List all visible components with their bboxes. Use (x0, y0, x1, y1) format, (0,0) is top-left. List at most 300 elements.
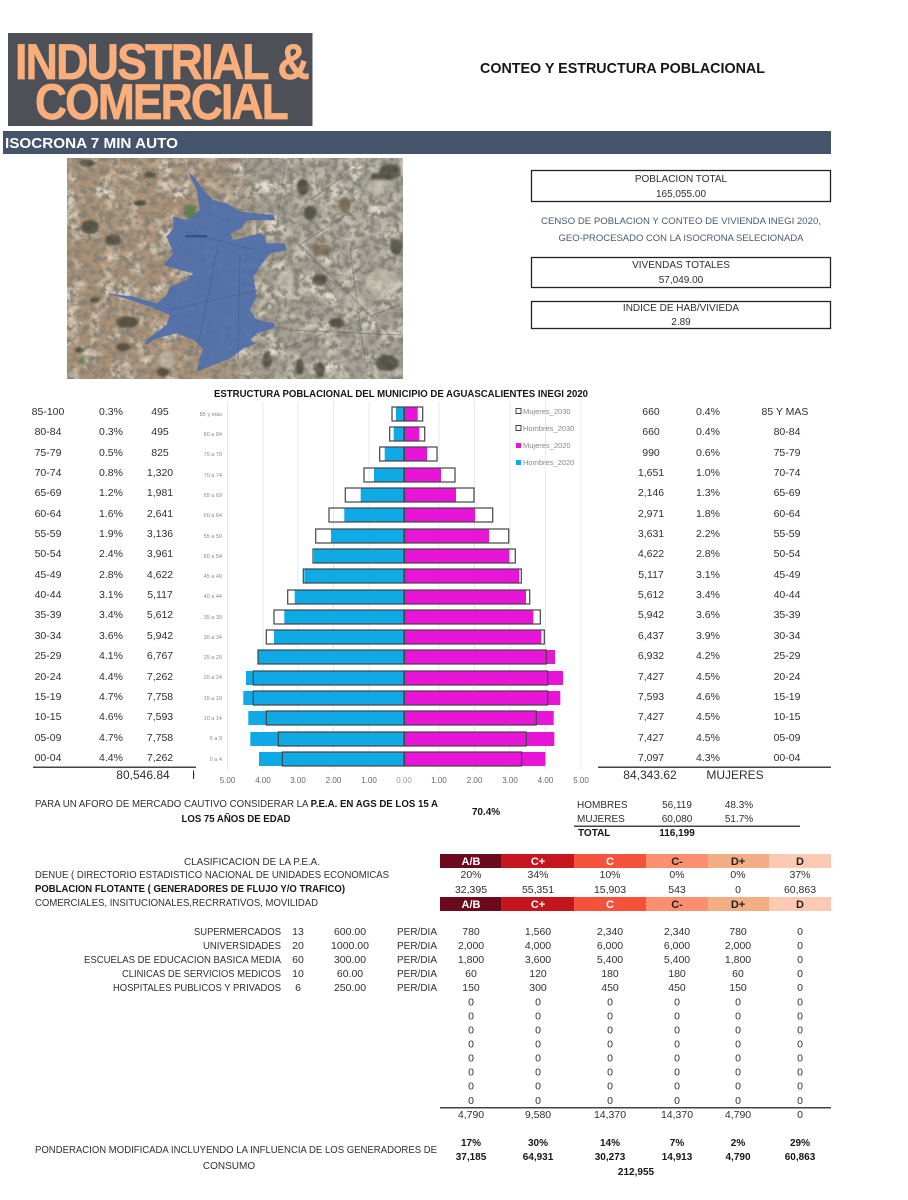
table: traffic generators: 0 (535, 1038, 541, 1050)
table: men by age: 65-69 (35, 487, 62, 499)
table: men by age: 7,758 (147, 732, 173, 744)
table: traffic generators: ESCUELAS DE EDUCACION BASICA MEDIA (84, 955, 281, 966)
bars: 2030 women outline (404, 407, 548, 766)
table: P.E.A. by sex: TOTAL (578, 828, 610, 839)
table: women by age: 7,427 (638, 732, 664, 744)
socioeconomic header: top (440, 854, 831, 868)
table: traffic generators: 0 (535, 1024, 541, 1036)
modified weighting values: 4,790 (725, 1152, 751, 1163)
table: traffic generators: 0 (797, 968, 803, 980)
table: traffic generators: 150 (462, 982, 480, 994)
stat: 70.4 percent: 70.4% (472, 807, 500, 818)
chart x axis (220, 776, 589, 785)
table: women by age: 5,612 (638, 589, 664, 601)
table: women by age: 75-79 (774, 447, 801, 459)
table: women by age: 7,427 (638, 671, 664, 683)
logo: Industrial & Comercial: COMERCIAL (35, 74, 287, 130)
table: women by age: 4.2% (696, 650, 720, 662)
chart age labels: 70 a 74 (204, 473, 222, 479)
modified weighting values: 17% (461, 1138, 481, 1149)
table: traffic generators: 60.00 (337, 968, 363, 980)
table: traffic generators: 0 (535, 1052, 541, 1064)
table: men by age: 0.3% (99, 426, 123, 438)
source note (541, 216, 821, 244)
table: traffic generators: 0 (797, 1080, 803, 1092)
socioeconomic header: bottom: C+ (531, 899, 545, 911)
table: traffic generators: 0 (797, 1010, 803, 1022)
table: women by age: 1,651 (638, 467, 664, 479)
table: women by age: 40-44 (774, 589, 801, 601)
population pyramid chart (200, 402, 589, 785)
table: traffic generators: 9,580 (525, 1109, 551, 1121)
table: women by age: 7,097 (638, 752, 664, 764)
table: women by age: 4.5% (696, 711, 720, 723)
table: men by age: 00-04 (35, 752, 62, 764)
table: men by age: 4.6% (99, 711, 123, 723)
note: captive market: PARA UN AFORO DE MERCADO CAUTIVO CONSIDERAR LA P.E.A. EN AGS DE LOS 15 A (35, 799, 438, 810)
table: men by age: 7,262 (147, 671, 173, 683)
table: women by age: MUJERES (706, 768, 764, 782)
table: traffic generators: 450 (668, 982, 686, 994)
table: traffic generators: 0 (607, 1038, 613, 1050)
chart x axis: 5.00 (220, 776, 236, 785)
table: traffic generators: 250.00 (334, 982, 366, 994)
classification row labels (35, 857, 389, 909)
table: traffic generators: 20 (292, 940, 304, 952)
chart age labels: 20 a 24 (204, 675, 222, 681)
table: traffic generators: 0 (674, 996, 680, 1008)
table: traffic generators: 0 (468, 996, 474, 1008)
table: traffic generators: 780 (462, 926, 480, 938)
table: women by age (598, 406, 831, 782)
table: women by age: 7,593 (638, 691, 664, 703)
table: traffic generators: 0 (797, 982, 803, 994)
table: traffic generators: 5,400 (664, 954, 690, 966)
chart age labels: 60 a 64 (204, 513, 222, 519)
DENUE values: 15,903 (594, 884, 626, 896)
table: traffic generators: CLINICAS DE SERVICIOS MEDICOS (122, 969, 281, 980)
chart age labels: 65 a 69 (204, 493, 222, 499)
table: men by age: 7,262 (147, 752, 173, 764)
stat box: inhabitants per dwelling: 2.89 (671, 317, 691, 328)
table: P.E.A. by sex: 60,080 (662, 814, 693, 825)
table: traffic generators: 0 (735, 1024, 741, 1036)
table: women by age: 0.6% (696, 447, 720, 459)
modified weighting values: 29% (790, 1138, 810, 1149)
modified weighting values: 60,863 (785, 1152, 816, 1163)
DENUE percentages: 0% (730, 869, 746, 881)
table: traffic generators: 13 (292, 926, 304, 938)
chart age labels (200, 412, 222, 763)
table: traffic generators: 0 (735, 996, 741, 1008)
table: traffic generators: 6,000 (664, 940, 690, 952)
table: women by age: 3.9% (696, 630, 720, 642)
modified weighting values (456, 1138, 816, 1178)
table: men by age: 25-29 (35, 650, 62, 662)
table: men by age: 4.7% (99, 691, 123, 703)
chart x axis: 2.00 (326, 776, 342, 785)
modified weighting note: PONDERACION MODIFICADA INCLUYENDO LA INFLUENCIA DE LOS GENERADORES DE (35, 1145, 437, 1156)
table: traffic generators: 0 (797, 996, 803, 1008)
chart x axis: 3.00 (502, 776, 518, 785)
table: men by age (32, 406, 201, 782)
table: traffic generators (84, 926, 831, 1121)
socioeconomic header: bottom: C- (671, 899, 683, 911)
table: traffic generators: 2,000 (458, 940, 484, 952)
chart legend (516, 407, 574, 467)
table: traffic generators: 0 (468, 1052, 474, 1064)
table: women by age: 660 (642, 426, 660, 438)
table: traffic generators: 0 (468, 1024, 474, 1036)
table: traffic generators: 4,790 (725, 1109, 751, 1121)
table: traffic generators: 6 (295, 982, 301, 994)
table: traffic generators: 0 (607, 1024, 613, 1036)
table: women by age: 4,622 (638, 548, 664, 560)
table: men by age: 6,767 (147, 650, 173, 662)
stat box: inhabitants per dwelling: INDICE DE HAB/VIVIEDA (623, 303, 739, 314)
table: women by age: 3.6% (696, 609, 720, 621)
table: traffic generators: 0 (797, 1066, 803, 1078)
section header bar (3, 131, 831, 154)
table: traffic generators: 60 (465, 968, 477, 980)
DENUE percentages (460, 869, 811, 881)
modified weighting note (35, 1145, 437, 1172)
table: men by age: 1.6% (99, 508, 123, 520)
table: traffic generators: 0 (674, 1052, 680, 1064)
table: traffic generators: 0 (735, 1052, 741, 1064)
table: men by age: 495 (151, 406, 169, 418)
title: CONTEO Y ESTRUCTURA POBLACIONAL (480, 60, 765, 77)
table: women by age: 3,631 (638, 528, 664, 540)
stat box: total dwellings (532, 258, 830, 288)
table: traffic generators: 0 (797, 940, 803, 952)
table: traffic generators: 0 (468, 1080, 474, 1092)
table: traffic generators: 0 (735, 1010, 741, 1022)
DENUE values: 32,395 (455, 884, 487, 896)
chart age labels: 0 a 4 (210, 757, 222, 763)
table: traffic generators: 0 (797, 1095, 803, 1107)
table: P.E.A. by sex (574, 800, 800, 839)
chart age labels: 55 a 59 (204, 534, 222, 540)
chart x axis: 1.00 (361, 776, 377, 785)
chart legend: Mujeres_2030 (523, 407, 571, 416)
table: traffic generators: 0 (607, 996, 613, 1008)
table: men by age: 0.5% (99, 447, 123, 459)
table: traffic generators: 5,400 (597, 954, 623, 966)
socioeconomic header: top: C- (671, 856, 683, 868)
modified weighting values: 7% (670, 1138, 684, 1149)
bars: 2020 men (243, 407, 404, 766)
table: traffic generators: 0 (797, 926, 803, 938)
socioeconomic header: top: C (606, 856, 614, 868)
table: traffic generators: 0 (607, 1066, 613, 1078)
table: men by age: 3.1% (99, 589, 123, 601)
DENUE values: 55,351 (522, 884, 554, 896)
table: traffic generators: HOSPITALES PUBLICOS Y PRIVADOS (113, 983, 281, 994)
table: men by age: H (192, 768, 201, 782)
modified weighting note: CONSUMO (203, 1161, 255, 1172)
table: men by age: 4,622 (147, 569, 173, 581)
table: men by age: 2.8% (99, 569, 123, 581)
table: men by age: 85-100 (32, 406, 65, 418)
note: captive market (35, 799, 438, 825)
map: isochrone over satellite image (67, 158, 403, 379)
stat box: inhabitants per dwelling (532, 302, 830, 328)
table: men by age: 0.3% (99, 406, 123, 418)
table: traffic generators: 14,370 (594, 1109, 626, 1121)
stat box: total dwellings: 57,049.00 (659, 275, 704, 286)
bars: 2030 men outline (253, 407, 404, 766)
table: traffic generators: 0 (735, 1066, 741, 1078)
table: traffic generators: 180 (668, 968, 686, 980)
chart age labels: 75 a 79 (204, 452, 222, 458)
table: men by age: 60-64 (35, 508, 62, 520)
DENUE values: 543 (668, 884, 686, 896)
table: women by age: 60-64 (774, 508, 801, 520)
table: women by age: 35-39 (774, 609, 801, 621)
stat box: total population: POBLACION TOTAL (635, 174, 728, 185)
table: traffic generators: 2,000 (725, 940, 751, 952)
table: women by age: 55-59 (774, 528, 801, 540)
table: men by age: 10-15 (35, 711, 62, 723)
table: women by age: 3.1% (696, 569, 720, 581)
DENUE percentages: 37% (789, 869, 811, 881)
table: men by age: 2,641 (147, 508, 173, 520)
section header bar: ISOCRONA 7 MIN AUTO (5, 135, 178, 152)
table: women by age: 45-49 (774, 569, 801, 581)
source note: GEO-PROCESADO CON LA ISOCRONA SELECIONADA (558, 233, 804, 244)
table: women by age: 1.8% (696, 508, 720, 520)
chart x axis: 3.00 (290, 776, 306, 785)
table: traffic generators: 0 (535, 996, 541, 1008)
table: traffic generators: 150 (729, 982, 747, 994)
socioeconomic header: top: D (796, 856, 804, 868)
table: traffic generators: 0 (797, 1024, 803, 1036)
table: women by age: 660 (642, 406, 660, 418)
table: traffic generators: 0 (535, 1010, 541, 1022)
modified weighting values: 64,931 (523, 1152, 554, 1163)
chart x axis: 0.00 (396, 776, 412, 785)
table: men by age: 40-44 (35, 589, 62, 601)
table: women by age: 7,427 (638, 711, 664, 723)
classification row labels: CLASIFICACION DE LA P.E.A. (184, 857, 320, 868)
classification row labels: DENUE ( DIRECTORIO ESTADISTICO NACIONAL DE UNIDADES ECONOMICAS (35, 870, 389, 881)
table: traffic generators: 600.00 (334, 926, 366, 938)
logo: Industrial & Comercial: INDUSTRIAL & (15, 34, 309, 90)
table: traffic generators: PER/DIA (397, 983, 437, 994)
table: traffic generators: 60 (292, 954, 304, 966)
table: women by age: 85 Y MAS (762, 406, 808, 418)
stat box: total dwellings: VIVENDAS TOTALES (632, 260, 730, 271)
table: women by age: 84,343.62 (623, 768, 677, 782)
table: men by age: 30-34 (35, 630, 62, 642)
chart x axis: 1.00 (431, 776, 447, 785)
chart age labels: 50 a 54 (204, 554, 222, 560)
table: traffic generators: 10 (292, 968, 304, 980)
chart x axis: 4.00 (255, 776, 271, 785)
chart age labels: 40 a 44 (204, 594, 222, 600)
table: men by age: 05-09 (35, 732, 62, 744)
table: men by age: 35-39 (35, 609, 62, 621)
table: traffic generators: PER/DIA (397, 941, 437, 952)
DENUE percentages: 34% (527, 869, 549, 881)
table: men by age: 20-24 (35, 671, 62, 683)
table: women by age: 3.4% (696, 589, 720, 601)
chart age labels: 5 a 9 (210, 736, 222, 742)
table: men by age: 825 (151, 447, 169, 459)
table: traffic generators: 0 (468, 1066, 474, 1078)
table: men by age: 5,942 (147, 630, 173, 642)
chart legend: Mujeres_2020 (523, 441, 571, 450)
table: men by age: 4.1% (99, 650, 123, 662)
table: men by age: 70-74 (35, 467, 62, 479)
table: women by age: 4.5% (696, 732, 720, 744)
table: traffic generators: PER/DIA (397, 969, 437, 980)
classification row labels: COMERCIALES, INSITUCIONALES,RECRRATIVOS, MOVILIDAD (35, 898, 318, 909)
table: women by age: 5,942 (638, 609, 664, 621)
table: traffic generators: 1,560 (525, 926, 551, 938)
table: women by age: 25-29 (774, 650, 801, 662)
table: men by age: 45-49 (35, 569, 62, 581)
table: men by age: 4.4% (99, 752, 123, 764)
chart age labels: 25 a 29 (204, 655, 222, 661)
DENUE percentages: 10% (599, 869, 621, 881)
table: men by age: 2.4% (99, 548, 123, 560)
table: men by age: 80-84 (35, 426, 62, 438)
table: men by age: 75-79 (35, 447, 62, 459)
table: traffic generators: 6,000 (597, 940, 623, 952)
table: traffic generators: 0 (674, 1024, 680, 1036)
chart age labels: 35 a 39 (204, 615, 222, 621)
table: traffic generators: 4,790 (458, 1109, 484, 1121)
socioeconomic header: bottom: C (606, 899, 614, 911)
table: men by age: 3,136 (147, 528, 173, 540)
modified weighting values: 2% (731, 1138, 745, 1149)
table: women by age: 4.3% (696, 752, 720, 764)
table: women by age: 6,437 (638, 630, 664, 642)
table: women by age: 1.3% (696, 487, 720, 499)
table: traffic generators: 1,800 (458, 954, 484, 966)
table: traffic generators: 0 (607, 1080, 613, 1092)
table: women by age: 15-19 (774, 691, 801, 703)
socioeconomic header: top: C+ (531, 856, 545, 868)
table: traffic generators: 180 (601, 968, 619, 980)
table: men by age: 3,961 (147, 548, 173, 560)
table: traffic generators: 0 (674, 1038, 680, 1050)
table: P.E.A. by sex: 51.7% (725, 814, 753, 825)
table: traffic generators: 300 (529, 982, 547, 994)
table: traffic generators: 450 (601, 982, 619, 994)
table: men by age: 1.9% (99, 528, 123, 540)
table: traffic generators: 0 (468, 1038, 474, 1050)
table: men by age: 0.8% (99, 467, 123, 479)
table: women by age: 2.8% (696, 548, 720, 560)
chart x axis: 2.00 (467, 776, 483, 785)
table: traffic generators: 0 (535, 1066, 541, 1078)
chart legend: Hombres_2030 (523, 424, 574, 433)
table: women by age: 05-09 (774, 732, 801, 744)
chart age labels: 10 a 14 (204, 716, 222, 722)
white mask clipping men total label (194, 768, 208, 782)
chart x axis: 4.00 (538, 776, 554, 785)
chart age labels: 80 a 84 (204, 432, 222, 438)
table: women by age: 50-54 (774, 548, 801, 560)
table: P.E.A. by sex: 48.3% (725, 800, 753, 811)
table: men by age: 1.2% (99, 487, 123, 499)
chart age labels: 15 a 19 (204, 696, 222, 702)
table: traffic generators: 0 (535, 1080, 541, 1092)
source note: CENSO DE POBLACION Y CONTEO DE VIVIENDA INEGI 2020, (541, 216, 821, 227)
table: traffic generators: 0 (607, 1010, 613, 1022)
table: traffic generators: 0 (607, 1095, 613, 1107)
table: men by age: 80,546.84 (116, 768, 170, 782)
table: P.E.A. by sex: 56,119 (662, 800, 692, 811)
chart age labels: 30 a 34 (204, 635, 222, 641)
DENUE percentages: 20% (460, 869, 482, 881)
table: women by age: 4.6% (696, 691, 720, 703)
table: traffic generators: PER/DIA (397, 955, 437, 966)
table: traffic generators: PER/DIA (397, 927, 437, 938)
table: P.E.A. by sex: 116,199 (659, 828, 695, 839)
table: men by age: 50-54 (35, 548, 62, 560)
table: traffic generators: 0 (797, 1052, 803, 1064)
socioeconomic header: bottom: D+ (731, 899, 745, 911)
bars: 2020 women (404, 407, 563, 766)
socioeconomic header: top: A/B (462, 856, 481, 868)
table: traffic generators: 0 (735, 1038, 741, 1050)
table: P.E.A. by sex: MUJERES (577, 814, 625, 825)
stat box: total population (532, 170, 830, 202)
table: traffic generators: 0 (674, 1080, 680, 1092)
table: women by age: 2.2% (696, 528, 720, 540)
table: traffic generators: 0 (674, 1010, 680, 1022)
chart age labels: 45 a 49 (204, 574, 222, 580)
table: women by age: 20-24 (774, 671, 801, 683)
table: traffic generators: 0 (735, 1080, 741, 1092)
table: traffic generators: 0 (674, 1095, 680, 1107)
table: men by age: 1,320 (147, 467, 173, 479)
table: men by age: 1,981 (147, 487, 173, 499)
DENUE values: 60,863 (784, 884, 816, 896)
table: traffic generators: UNIVERSIDADES (203, 941, 281, 952)
table: traffic generators: 3,600 (525, 954, 551, 966)
table: traffic generators: 2,340 (664, 926, 690, 938)
modified weighting values: 37,185 (456, 1152, 487, 1163)
modified weighting values: 14% (600, 1138, 620, 1149)
chart x axis: 5.00 (573, 776, 589, 785)
DENUE percentages: 0% (669, 869, 685, 881)
table: women by age: 10-15 (774, 711, 801, 723)
classification row labels: POBLACION FLOTANTE ( GENERADORES DE FLUJO Y/O TRAFICO) (35, 884, 345, 895)
stat box: total population: 165,055.00 (656, 189, 706, 200)
modified weighting values: 30% (528, 1138, 548, 1149)
table: traffic generators: SUPERMERCADOS (194, 927, 281, 938)
table: women by age: 990 (642, 447, 660, 459)
table: men by age: 4.7% (99, 732, 123, 744)
socioeconomic header: bottom: D (796, 899, 804, 911)
socioeconomic header: bottom: A/B (462, 899, 481, 911)
table: traffic generators: 780 (729, 926, 747, 938)
table: men by age: 5,117 (147, 589, 173, 601)
table: traffic generators: 0 (674, 1066, 680, 1078)
table: traffic generators: 1,800 (725, 954, 751, 966)
modified weighting values: 14,913 (662, 1152, 693, 1163)
socioeconomic header: bottom (440, 897, 831, 911)
table: traffic generators: 120 (529, 968, 547, 980)
chart age labels: 85 y más (200, 412, 222, 418)
modified weighting values: 30,273 (595, 1152, 626, 1163)
table: traffic generators: 0 (797, 1038, 803, 1050)
